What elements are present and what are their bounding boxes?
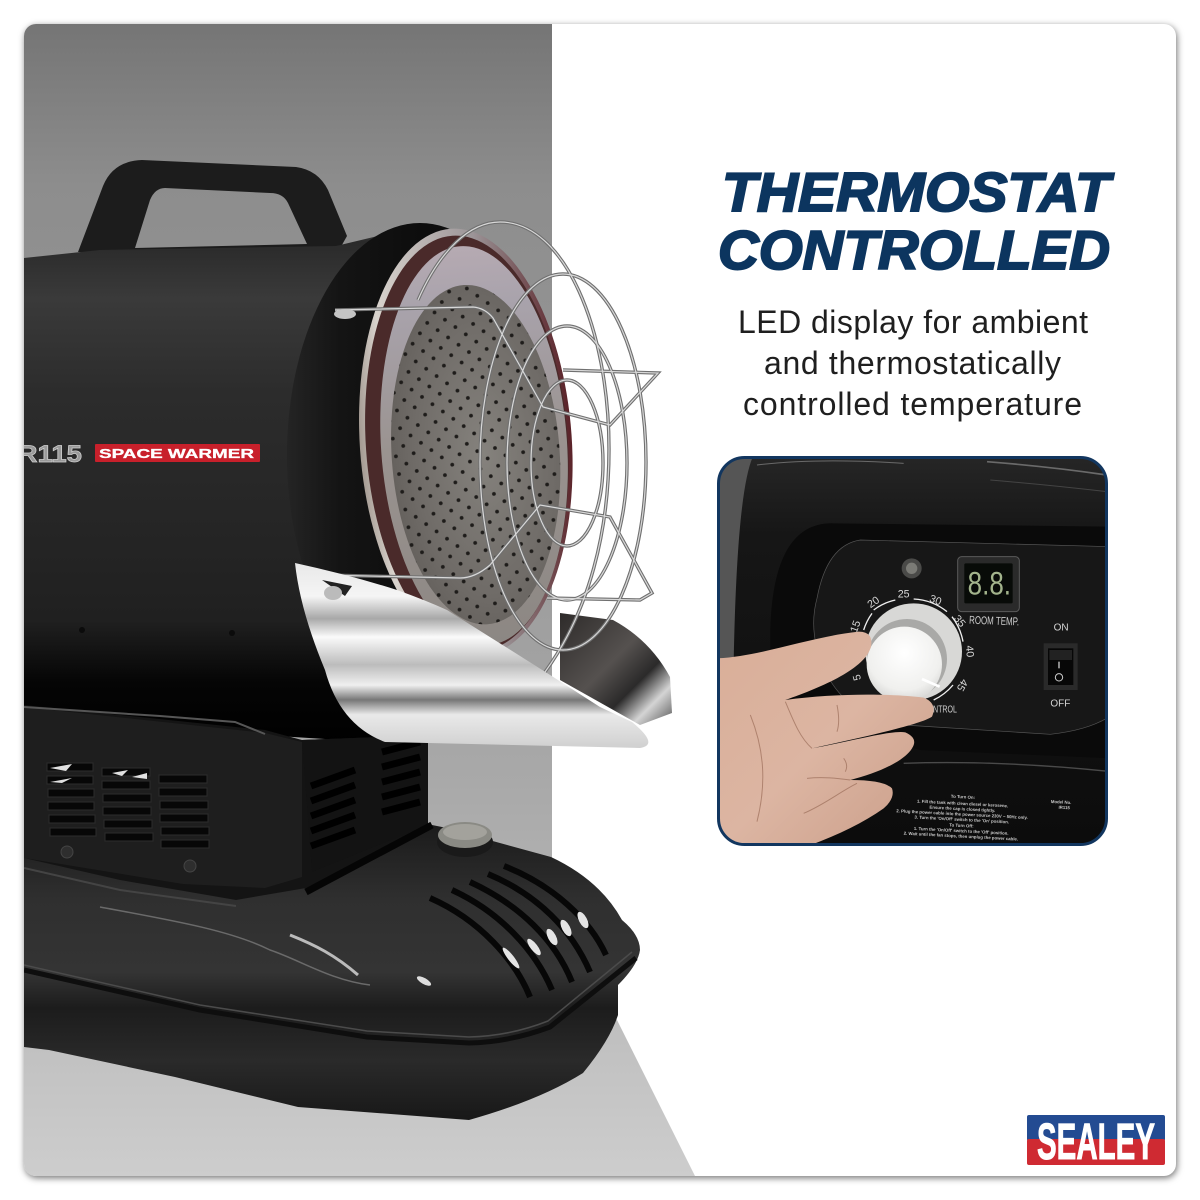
heater handle bbox=[78, 160, 347, 252]
heading bbox=[718, 161, 1115, 281]
lower vent housing bbox=[24, 705, 428, 900]
tank ribs bbox=[430, 866, 606, 997]
dial scale: 5 bbox=[851, 673, 864, 682]
heater product photo bbox=[10, 160, 672, 1120]
dial scale: 30 bbox=[928, 593, 943, 608]
control panel photo bbox=[717, 455, 1112, 850]
LED display: 8.8. bbox=[968, 565, 1011, 601]
side vents bbox=[311, 742, 420, 846]
left backdrop strip bbox=[720, 459, 752, 658]
lower casing ledge bbox=[904, 763, 1112, 772]
room temp label: ROOM TEMP. bbox=[969, 615, 1019, 628]
dial scale bbox=[848, 589, 976, 700]
LED display bbox=[958, 557, 1019, 612]
body model name and badge: IR115 bbox=[10, 441, 82, 468]
instruction label: 1. Fill the tank with clean diesel or kerosene. bbox=[917, 799, 1008, 808]
heading: CONTROLLED bbox=[718, 219, 1110, 281]
dial scale: 20 bbox=[865, 594, 882, 611]
photo border bbox=[718, 458, 1106, 844]
description text: controlled temperature bbox=[743, 386, 1082, 422]
body model name and badge: SPACE WARMER bbox=[99, 446, 255, 461]
tank flange bbox=[24, 958, 636, 1043]
fuel tank bbox=[24, 822, 640, 1120]
instruction label: IR115 bbox=[1058, 805, 1071, 810]
control face plate bbox=[814, 540, 1112, 734]
heading: THERMOSTAT bbox=[722, 161, 1115, 223]
instruction label: 3. Turn the 'On/Off' switch to the 'On' position. bbox=[914, 815, 1009, 824]
tank contour highlights bbox=[100, 907, 370, 985]
instruction label: To Turn Off: bbox=[949, 822, 974, 829]
power switch bbox=[1044, 623, 1078, 709]
instruction label: 2. Wait until the fan stops, then unplug the power cable. bbox=[904, 831, 1018, 842]
indicator lamp bbox=[902, 558, 922, 578]
dial scale: 35 bbox=[951, 613, 968, 630]
dial scale: 15 bbox=[848, 619, 864, 634]
knob bbox=[865, 603, 962, 702]
power switch: OFF bbox=[1050, 698, 1070, 709]
dial scale: 40 bbox=[963, 645, 976, 658]
body model name and badge bbox=[24, 444, 260, 462]
hand bbox=[717, 632, 934, 850]
front ring bbox=[290, 223, 450, 590]
heat reflector dish bbox=[359, 228, 573, 647]
dial scale: 25 bbox=[898, 589, 910, 601]
perforated plate bbox=[391, 285, 560, 624]
reflector shield front bbox=[295, 309, 648, 748]
fuel cap bbox=[437, 822, 493, 857]
power switch: ON bbox=[1054, 623, 1069, 634]
wire guard bbox=[323, 222, 658, 672]
instruction label: To Turn On: bbox=[951, 794, 976, 800]
panel: grey studio backdrop bbox=[24, 24, 695, 1176]
instruction label: 1. Turn the 'On/Off' switch to the 'Off' position. bbox=[914, 826, 1009, 836]
description text bbox=[738, 304, 1088, 422]
recess bbox=[770, 524, 1105, 650]
control label: NTROL bbox=[933, 704, 957, 715]
instruction label: Model No. bbox=[1051, 799, 1072, 805]
instruction label bbox=[896, 794, 1072, 840]
description text: and thermostatically bbox=[764, 345, 1061, 381]
description text: LED display for ambient bbox=[738, 304, 1088, 340]
reflector shield lower cup bbox=[560, 613, 672, 725]
dial scale: 45 bbox=[954, 677, 970, 693]
rib highlights bbox=[501, 910, 591, 970]
body rivets bbox=[79, 627, 235, 636]
instruction label: 2. Plug the power cable into the power source 230V ~ 50Hz only. bbox=[896, 808, 1028, 820]
screws bbox=[61, 846, 73, 858]
front vents bbox=[47, 763, 209, 848]
heater cylinder body bbox=[24, 236, 376, 739]
instruction label: Ensure the cap is closed tightly. bbox=[929, 805, 995, 813]
casing highlights bbox=[757, 461, 1107, 492]
